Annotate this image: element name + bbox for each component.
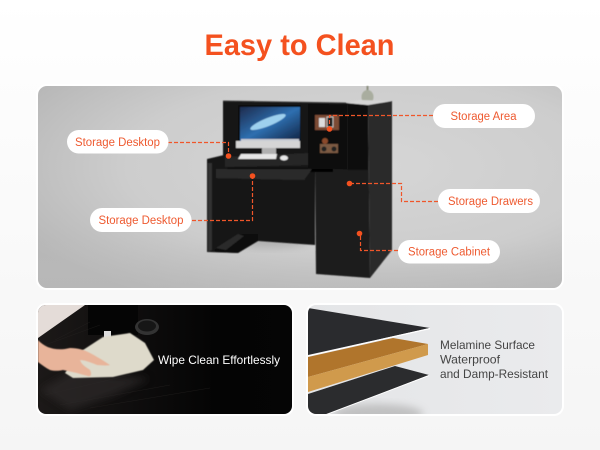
illustration: black reception desk (207, 86, 392, 278)
panel: desk overview (36, 84, 564, 290)
text: melamine description: Melamine Surface (440, 338, 535, 352)
cork core (308, 338, 428, 392)
callout: storage area (433, 104, 535, 128)
callout: storage cabinet: Storage Cabinet (408, 246, 491, 258)
callout: storage desktop upper: Storage Desktop (75, 137, 160, 149)
callout: storage desktop lower: Storage Desktop (98, 215, 184, 227)
text: wipe clean effortlessly: Wipe Clean Effortlessly (158, 353, 280, 367)
callout: storage drawers (438, 189, 540, 213)
text: melamine description: and Damp-Resistant (440, 367, 549, 381)
icon: computer monitor (236, 105, 301, 160)
desk reflection (46, 375, 143, 408)
callout: storage area: Storage Area (450, 111, 517, 123)
upper black sheet (308, 308, 430, 355)
callout dots (226, 126, 362, 236)
callout: storage desktop lower (90, 208, 192, 232)
callout: storage cabinet (398, 240, 500, 264)
wood grain (45, 322, 210, 408)
icon: cleaning cloth (65, 333, 154, 378)
desk body (207, 100, 392, 278)
callout lines (168, 116, 438, 250)
icon: cable grommet (135, 319, 159, 335)
title: Easy to Clean (204, 29, 394, 62)
icon: vase (362, 86, 374, 104)
icon: hand (38, 340, 110, 376)
lower black sheet (308, 366, 429, 415)
callout: storage drawers: Storage Drawers (448, 196, 533, 208)
text: melamine description (440, 338, 549, 381)
panel: wipe clean (36, 303, 294, 416)
panel: melamine surface (306, 303, 564, 424)
callout: storage desktop upper (67, 130, 168, 154)
text: melamine description: Waterproof (440, 352, 501, 366)
shelf: storage area (308, 104, 347, 169)
